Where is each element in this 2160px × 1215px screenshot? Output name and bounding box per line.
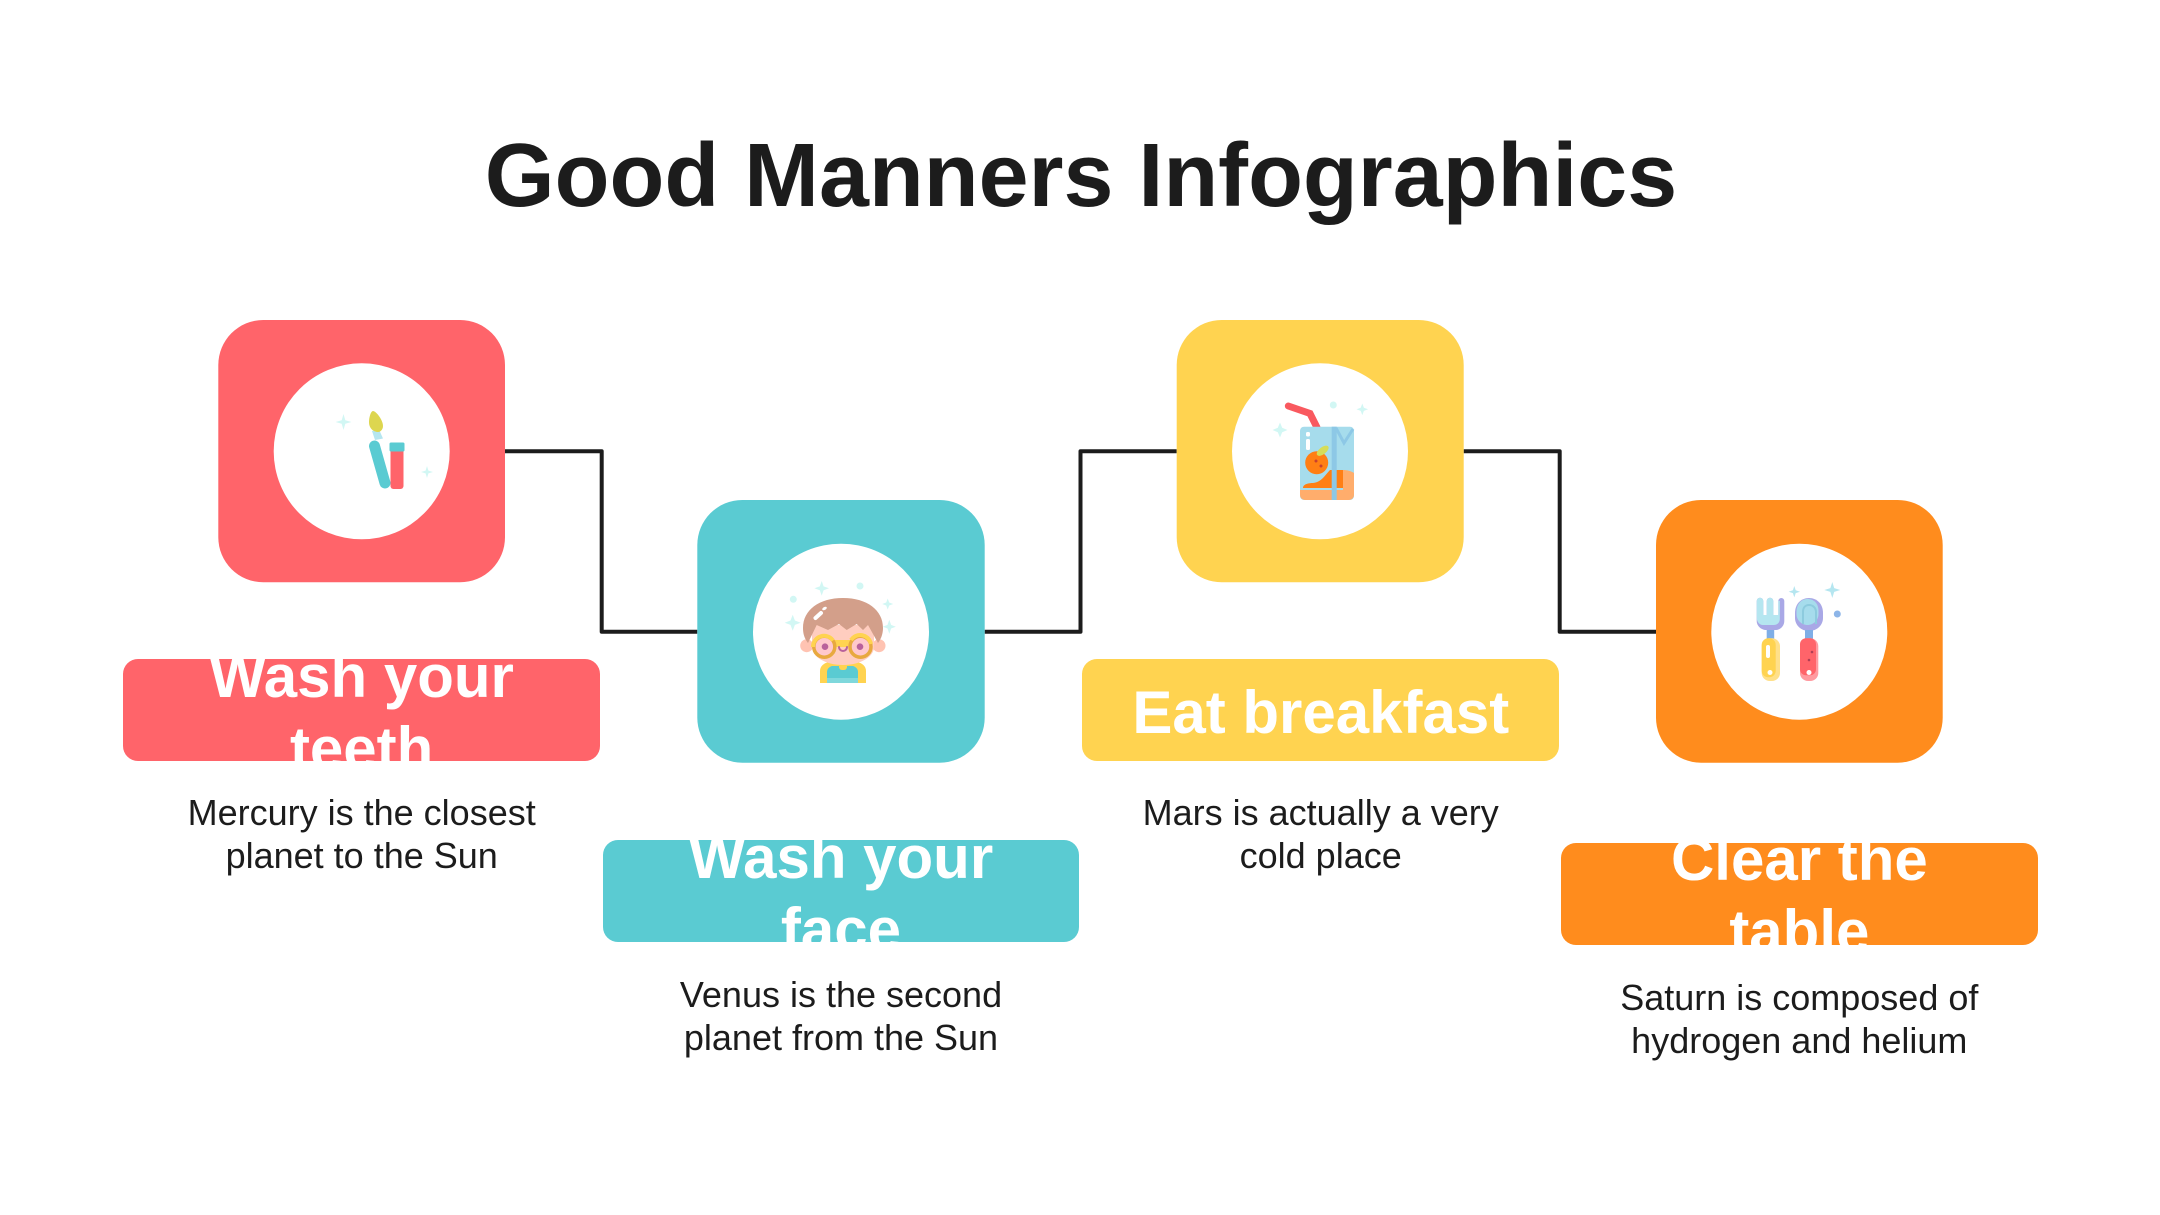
text: Saturn description: hydrogen and helium — [1631, 1020, 1967, 1061]
tile: teal — [697, 500, 985, 763]
circle: yellow tile — [1232, 363, 1408, 539]
text: Mercury description: Mercury is the closest — [188, 792, 536, 833]
text: Mars description: Mars is actually a very — [1143, 792, 1499, 833]
icon: boy with glasses — [785, 581, 896, 683]
banner: Clear the table — [1561, 843, 2038, 945]
text: Venus description — [680, 974, 1002, 1058]
banner: Eat breakfast — [1082, 659, 1559, 761]
connector: step 3 to step 4 — [1464, 451, 1656, 632]
banner: Wash your face — [603, 840, 1079, 942]
tile: orange — [1656, 500, 1943, 763]
text: Mars description: cold place — [1240, 835, 1402, 876]
banner: Wash your teeth — [123, 659, 600, 761]
text: Venus description: planet from the Sun — [684, 1017, 998, 1058]
icon: fork and spoon — [1757, 582, 1841, 681]
text: Mercury description: planet to the Sun — [226, 835, 498, 876]
text: Mars description — [1143, 792, 1499, 876]
title: Good Manners Infographics — [485, 126, 1677, 226]
text: Mercury description — [188, 792, 536, 876]
text: Saturn description — [1620, 977, 1978, 1061]
circle: red tile — [274, 363, 450, 539]
circle: orange tile — [1711, 544, 1887, 720]
icon: juice box — [1272, 402, 1368, 500]
circle: teal tile — [753, 544, 929, 720]
text: Saturn description: Saturn is composed of — [1620, 977, 1978, 1018]
connector: step 2 to step 3 — [985, 451, 1177, 632]
text: Venus description: Venus is the second — [680, 974, 1002, 1015]
connector: step 1 to step 2 — [505, 451, 697, 632]
tile: red — [218, 320, 505, 582]
tile: yellow — [1177, 320, 1464, 582]
banner: Eat breakfast: Eat breakfast — [1132, 679, 1509, 746]
icon: toothbrush and toothpaste — [336, 411, 433, 489]
